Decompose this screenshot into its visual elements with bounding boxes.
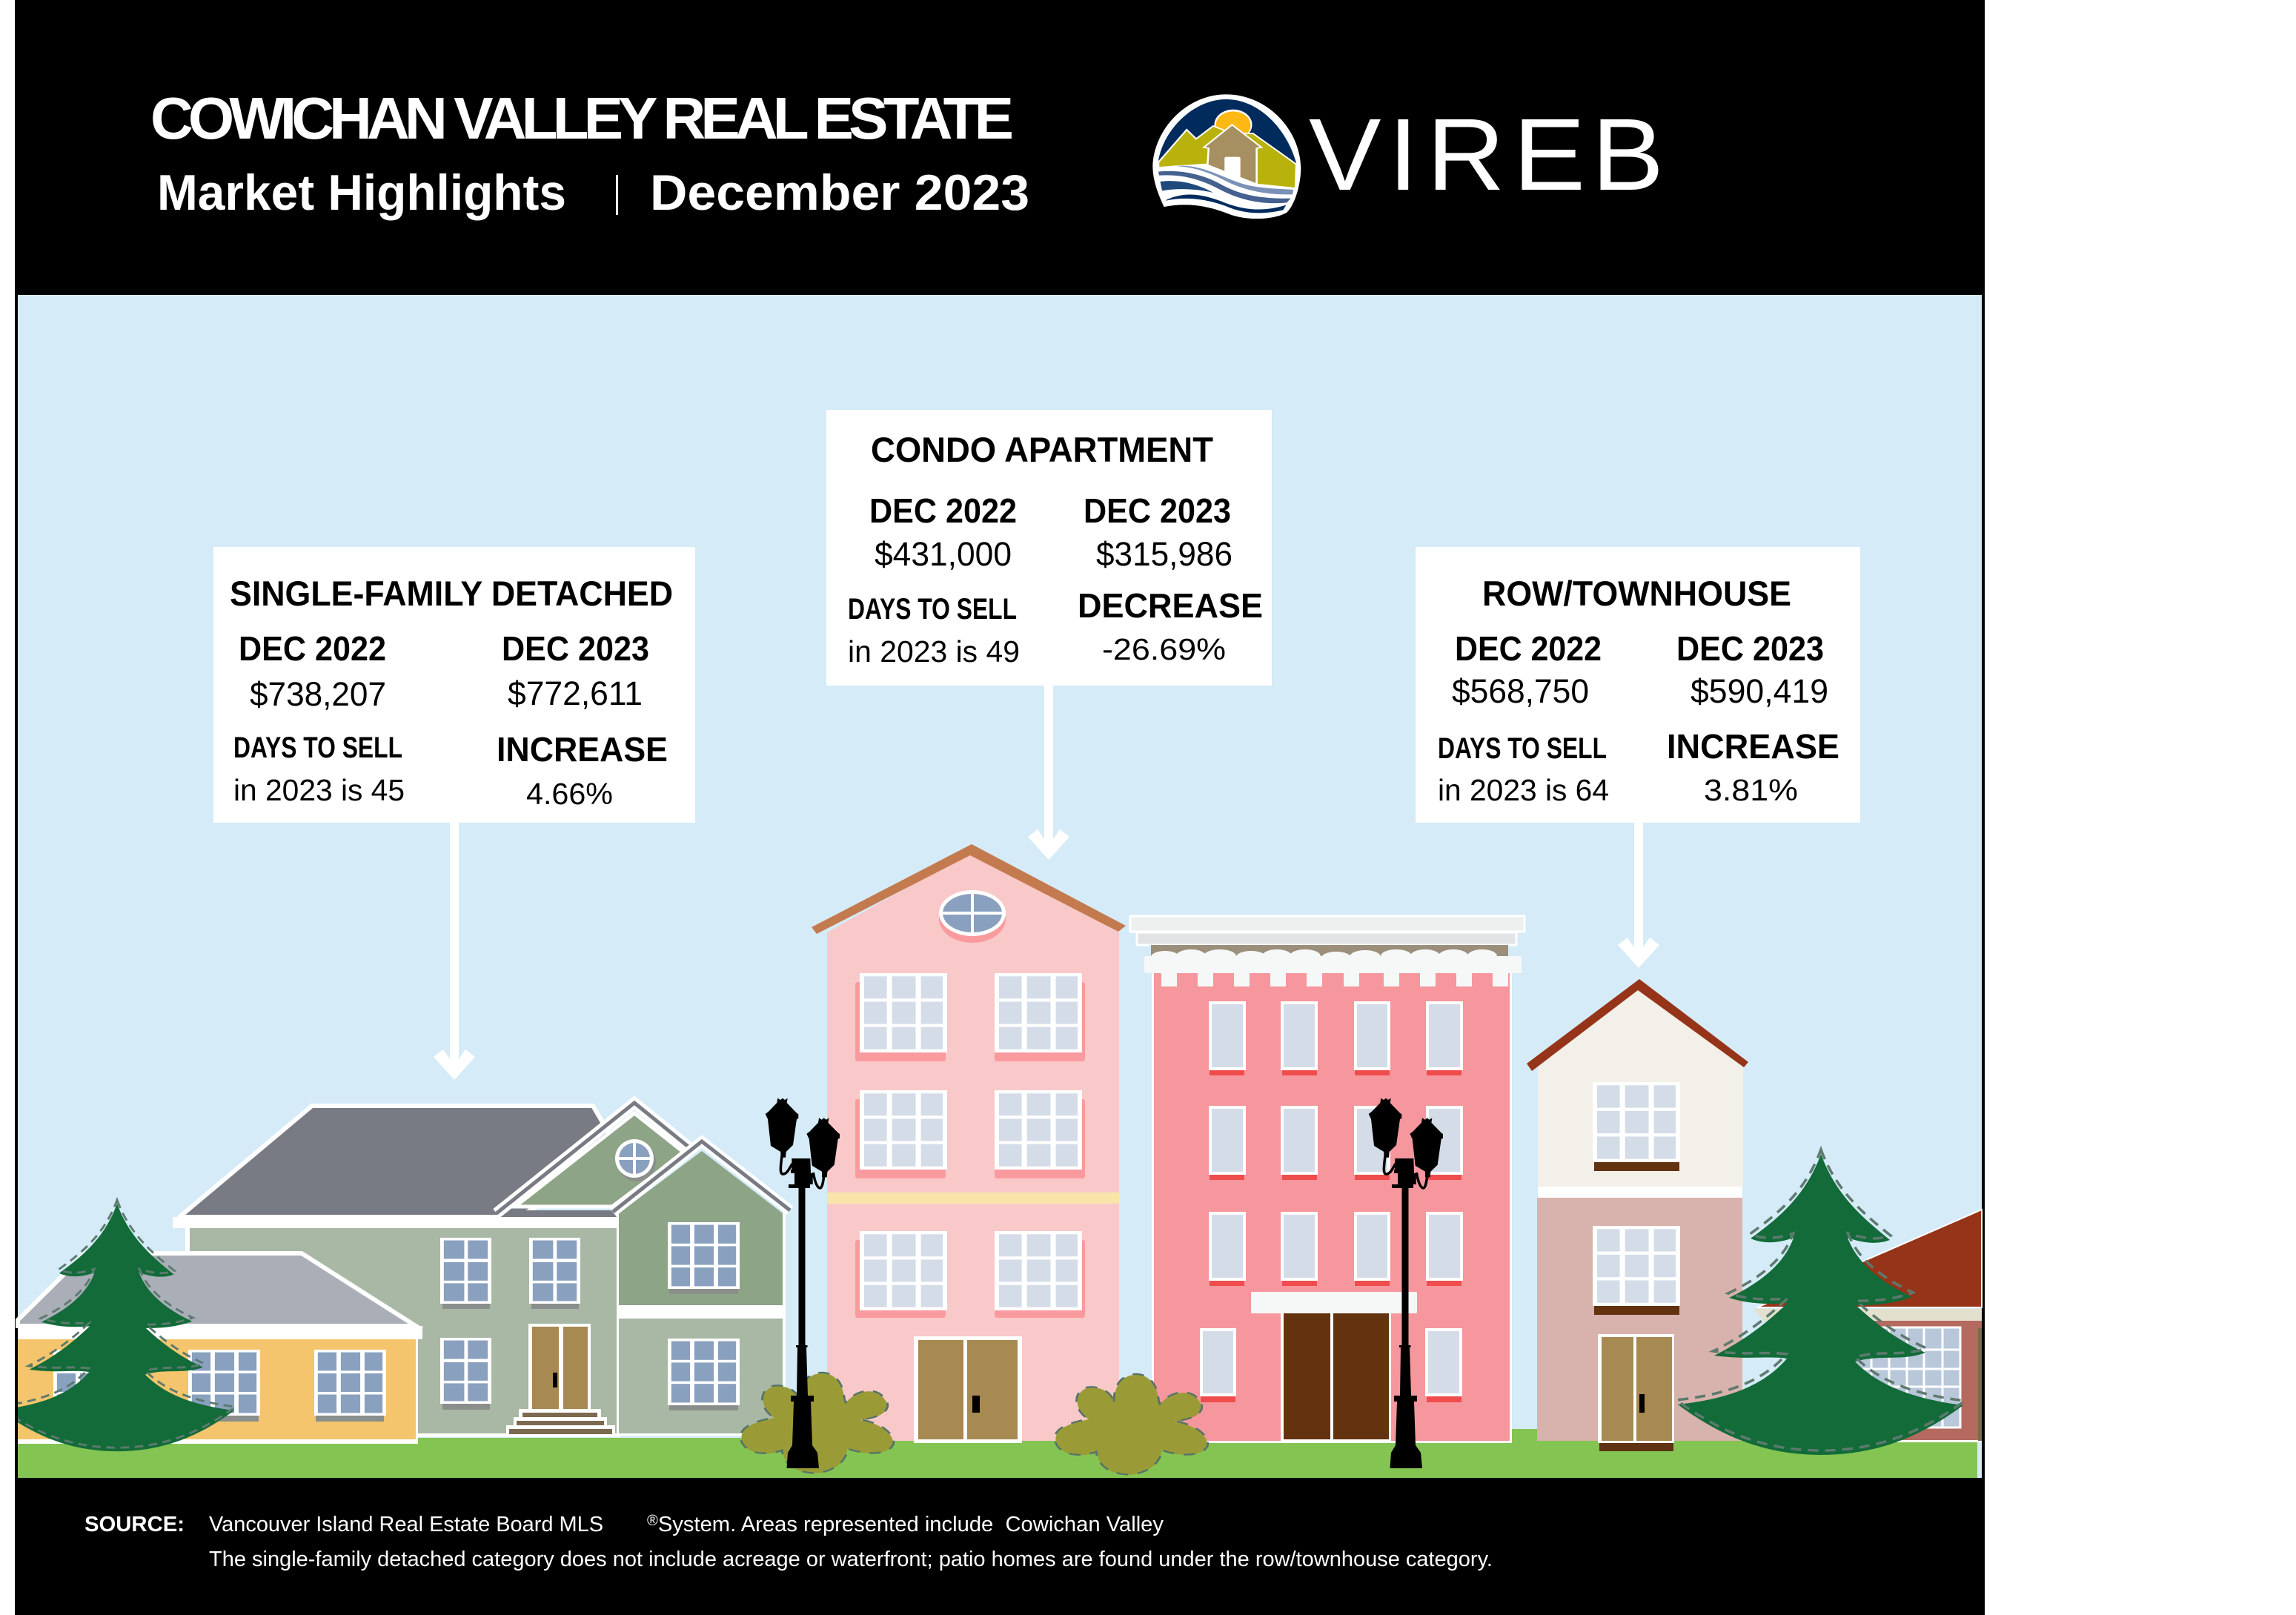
days to sell: DAYS TO SELL	[1438, 732, 1607, 765]
ground	[18, 1429, 1977, 1478]
red building door	[1281, 1313, 1391, 1442]
days to sell: in 2023 is 45	[233, 773, 405, 807]
change	[1667, 727, 1839, 807]
panel: row/townhouse	[1416, 547, 1860, 823]
panel heading: SINGLE-FAMILY DETACHED	[230, 574, 673, 613]
panel: single-family detached	[213, 547, 695, 823]
front door	[528, 1324, 591, 1409]
Dec 2023 column: $590,419	[1691, 672, 1828, 710]
tree left	[0, 1200, 236, 1451]
townhouse roof	[1527, 979, 1748, 1071]
cornice	[1130, 916, 1524, 986]
change: INCREASE	[497, 730, 668, 769]
awning	[1251, 1292, 1417, 1313]
change: 3.81%	[1704, 773, 1798, 807]
category note: The single-family detached category does not include acreage or waterfront; patio homes are found under the row/townhouse category.	[209, 1548, 1493, 1571]
Dec 2022 column: DEC 2022	[1455, 629, 1602, 668]
condo door	[914, 1336, 1022, 1443]
townhouse door	[1598, 1334, 1674, 1451]
panel heading: ROW/TOWNHOUSE	[1482, 574, 1791, 613]
condo wall	[827, 852, 1119, 1441]
registered system text: System. Areas represented include Cowichan Valley	[658, 1513, 1164, 1536]
wing windows	[669, 1289, 738, 1294]
house main wall	[185, 1223, 620, 1437]
bush left	[740, 1373, 894, 1473]
bush right	[1055, 1374, 1208, 1475]
building: condo apartment	[812, 844, 1126, 1443]
arrow: single-family	[434, 823, 475, 1080]
condo windows	[860, 973, 1082, 1310]
title: COWICHAN VALLEY REAL ESTATE	[150, 85, 1014, 151]
yellow band	[827, 1193, 1119, 1204]
side wing	[617, 1213, 786, 1436]
building: red apartment	[1130, 916, 1524, 1443]
arrow: condo	[1028, 686, 1069, 860]
title block	[150, 85, 1029, 221]
main roof	[179, 1106, 623, 1217]
white band	[1538, 1187, 1742, 1198]
days to sell	[848, 593, 1020, 669]
subtitle divider	[616, 175, 618, 215]
Dec 2023 column: DEC 2023	[1084, 491, 1231, 530]
dormer gable	[500, 1210, 617, 1217]
change: 4.66%	[526, 777, 613, 811]
Dec 2022 column: DEC 2022	[869, 491, 1017, 530]
days to sell: DAYS TO SELL	[848, 593, 1017, 626]
Dec 2023 column	[1084, 491, 1232, 573]
arrow: townhouse	[1618, 823, 1659, 968]
Dec 2022 column: $738,207	[250, 675, 386, 713]
change	[1078, 586, 1263, 666]
subtitle: Market Highlights	[157, 165, 566, 221]
Dec 2022 column: DEC 2022	[239, 629, 386, 668]
Dec 2022 column: $431,000	[875, 535, 1012, 573]
change	[497, 730, 668, 811]
change: -26.69%	[1102, 632, 1226, 666]
Dec 2022 column	[239, 629, 386, 713]
days to sell: in 2023 is 49	[848, 634, 1020, 669]
change: DECREASE	[1078, 586, 1263, 625]
street lamp left	[766, 1098, 840, 1468]
change: INCREASE	[1667, 727, 1839, 766]
building: red house behind tree	[1753, 1210, 1982, 1442]
VIREB logo	[1152, 94, 1664, 219]
building: townhouse	[1527, 979, 1748, 1451]
logo emblem	[1152, 94, 1301, 219]
Dec 2022 column	[869, 491, 1017, 573]
red wall	[1152, 967, 1512, 1443]
logo wordmark: VIREB	[1309, 98, 1664, 212]
days to sell	[1438, 732, 1609, 807]
red building windows	[1201, 1003, 1461, 1395]
Dec 2023 column: DEC 2023	[1676, 629, 1824, 668]
lower wing	[18, 1253, 416, 1326]
lower wing windows	[53, 1350, 125, 1416]
days to sell	[233, 732, 405, 807]
registered system text: ®	[647, 1513, 658, 1529]
Dec 2022 column	[1452, 629, 1602, 710]
panel: condo apartment	[826, 410, 1272, 686]
Dec 2022 column: $568,750	[1452, 672, 1589, 710]
days to sell: DAYS TO SELL	[233, 732, 402, 764]
condo roof	[812, 844, 1126, 934]
source label: SOURCE:	[84, 1513, 185, 1536]
date: December 2023	[650, 165, 1029, 221]
Dec 2023 column: $315,986	[1096, 535, 1232, 573]
red building sills	[1201, 1069, 1461, 1402]
condo window shadows	[855, 982, 1085, 1318]
Dec 2023 column: DEC 2023	[502, 629, 649, 668]
sky background	[18, 295, 1982, 1478]
panel heading: CONDO APARTMENT	[871, 430, 1213, 469]
oval window	[939, 890, 1006, 943]
main windows	[442, 1304, 490, 1309]
townhouse upper wall	[1538, 986, 1743, 1187]
front steps	[506, 1409, 615, 1435]
Dec 2023 column: $772,611	[508, 674, 643, 712]
street lamp right	[1369, 1098, 1443, 1468]
footer source notes	[84, 1513, 1493, 1571]
building: single-family house	[18, 1103, 790, 1444]
townhouse lower wall	[1537, 1198, 1742, 1441]
eave	[173, 1217, 619, 1228]
tree right	[1676, 1150, 1965, 1455]
Dec 2023 column	[1676, 629, 1828, 710]
days to sell: in 2023 is 64	[1438, 773, 1609, 807]
townhouse windows	[1593, 1082, 1680, 1162]
Dec 2023 column	[502, 629, 649, 712]
round window	[615, 1139, 656, 1181]
source text: Vancouver Island Real Estate Board MLS	[209, 1513, 603, 1536]
